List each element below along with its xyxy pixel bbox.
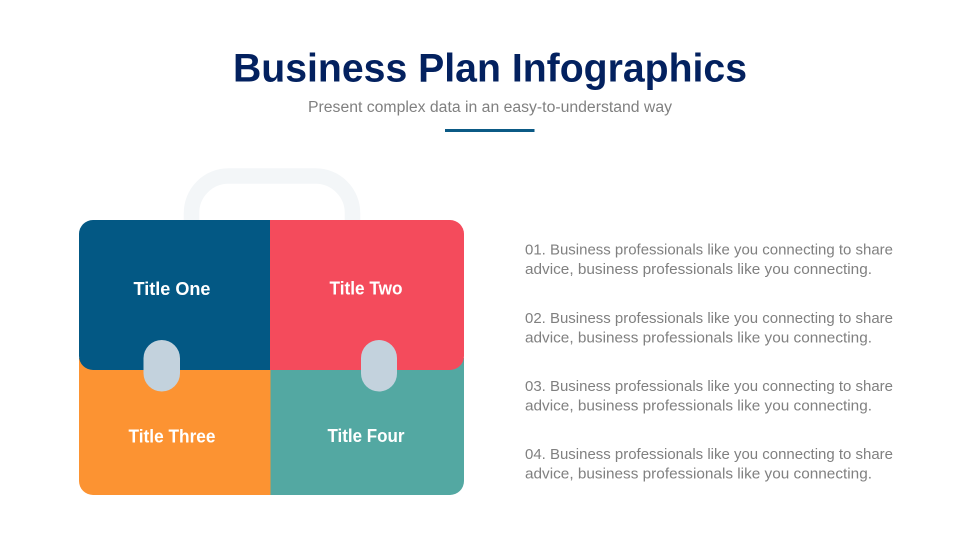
clasp: right (361, 340, 397, 392)
text block 04 (525, 446, 893, 482)
text block 04: 04. Business professionals like you connecting to share (525, 446, 893, 463)
text block 03: advice, business professionals like you connecting. (525, 398, 872, 414)
clasp: left (144, 340, 180, 392)
text block 02 (525, 310, 893, 346)
text block 03 (525, 378, 893, 414)
label: title two: Title Two (330, 278, 402, 298)
subtitle: Present complex data in an easy-to-understand way (308, 99, 672, 116)
panel: title four (270, 358, 464, 495)
panel: title three (79, 358, 270, 495)
text block 04: advice, business professionals like you connecting. (525, 466, 872, 482)
briefcase handle (192, 176, 352, 221)
text block 01: 01. Business professionals like you connecting to share (525, 242, 893, 258)
label: title four: Title Four (328, 425, 404, 446)
panel: title two (270, 220, 464, 370)
text block 02: advice, business professionals like you connecting. (525, 330, 872, 346)
label: title three: Title Three (128, 426, 216, 446)
label: title one: Title One (134, 278, 210, 299)
title underline (445, 129, 534, 132)
text block 02: 02. Business professionals like you connecting to share (525, 310, 893, 327)
title: Business Plan Infographics (233, 46, 747, 90)
text block 01: advice, business professionals like you connecting. (525, 261, 872, 278)
text block 03: 03. Business professionals like you connecting to share (525, 378, 893, 395)
text block 01 (525, 242, 893, 278)
briefcase (79, 176, 464, 495)
panel: title one (79, 220, 270, 370)
